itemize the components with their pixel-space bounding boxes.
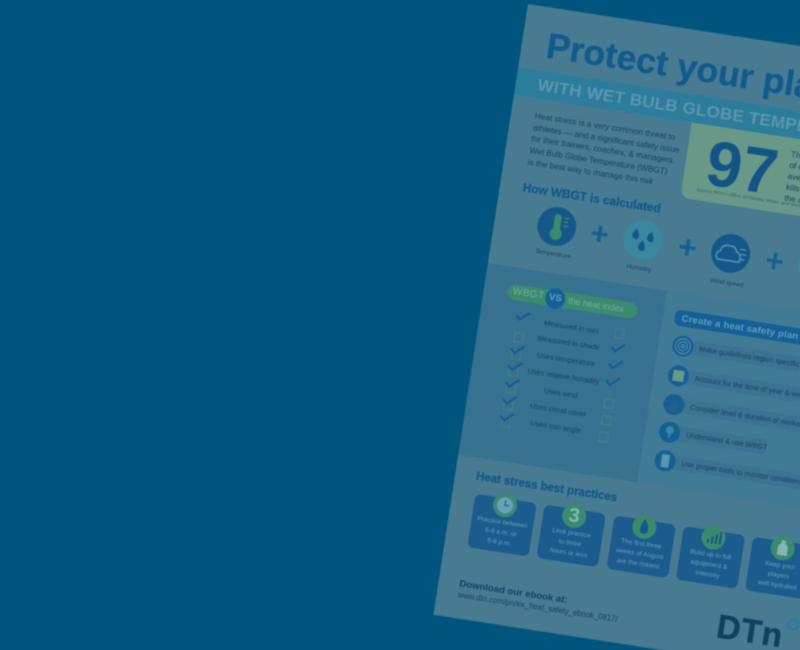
heat safety plan pill: Create a heat safety plan	[681, 313, 799, 342]
icon: clock	[491, 492, 519, 519]
plus: +	[676, 228, 700, 267]
big number 97: 97	[701, 127, 783, 209]
icon: calendar	[666, 364, 690, 388]
row: measured in shade: Measured in shade	[537, 333, 600, 352]
card: practice times	[467, 494, 537, 557]
card: riskiest weeks	[606, 515, 676, 578]
card: practice times: 6-8 p.m.	[487, 537, 512, 548]
icon: humidity	[621, 218, 665, 262]
intro paragraph: for their trainers, coaches, & managers.	[531, 134, 676, 166]
step: time of year	[678, 369, 800, 409]
stat text	[784, 149, 800, 205]
card: hydration: players	[767, 570, 790, 581]
card: build up: equipment &	[690, 559, 728, 571]
step: understand WBGT: Understand & use WBGT	[685, 430, 768, 452]
card: hydration: Keep your	[765, 560, 795, 571]
intro paragraph: Heat stress is a very common threat to	[534, 110, 676, 142]
label: humidity: Humidity	[626, 263, 652, 274]
card: build up: intensity	[695, 569, 720, 580]
card: build up: Build up to full	[690, 548, 732, 562]
panel: WBGT vs heat index	[458, 263, 667, 482]
download heading: Download our ebook at:	[459, 578, 568, 606]
label: temperature: Temperature	[535, 248, 571, 260]
card: limit practice: hours or less	[549, 547, 588, 560]
icon: water bottle	[769, 535, 796, 562]
intro paragraph	[527, 110, 680, 186]
icon: solar	[795, 245, 800, 289]
intro paragraph: Wet Bulb Globe Temperature (WBGT)	[529, 145, 668, 176]
panel: create a heat safety plan	[637, 291, 800, 534]
step: region specific	[682, 339, 800, 372]
icon: drop	[630, 513, 658, 541]
logo ring	[786, 618, 800, 632]
plus: +	[588, 214, 612, 253]
heading: heat stress best practices: Heat stress best practices	[475, 471, 618, 504]
step: workouts	[673, 397, 800, 438]
banner: with wet bulb globe temperature	[514, 67, 800, 174]
icon: number three	[561, 502, 588, 530]
row: uses sun angle: Uses sun angle	[530, 418, 582, 435]
intro paragraph: athletes — and a significant safety issue	[532, 122, 680, 155]
icon: bars	[700, 524, 727, 551]
step: proper tools	[665, 454, 800, 494]
icon: wind speed	[708, 231, 753, 276]
icon: monitor device	[653, 449, 677, 473]
card: limit practice: to three	[558, 538, 582, 548]
card: practice times: Practice between	[477, 515, 528, 530]
poster sheet	[433, 4, 800, 650]
comparison pill	[507, 283, 638, 319]
download url: www.dtn.com/pn/ex_heat_safety_ebook_0817/	[457, 590, 618, 624]
row: uses cloud cover: Uses cloud cover	[530, 401, 587, 419]
icon: figure	[662, 393, 686, 417]
VS badge: VS	[548, 292, 562, 305]
heading: how WBGT is calculated: How WBGT is calculated	[522, 180, 662, 216]
pill label: the heat index: the heat index	[567, 295, 625, 314]
card: riskiest weeks: are the riskiest	[616, 557, 660, 571]
card: limit practice	[536, 504, 606, 567]
icon: thermometer	[658, 420, 682, 444]
icon: number three: 3	[567, 504, 581, 528]
card: limit practice: Limit practice	[552, 527, 591, 540]
card: build up	[675, 526, 745, 589]
card: riskiest weeks: weeks of August	[615, 547, 664, 561]
icon: target	[671, 334, 695, 358]
card: practice times: 6-9 a.m. or	[485, 527, 517, 538]
step: understand WBGT	[669, 425, 767, 455]
step: proper tools: Use proper tools to monitor conditions	[681, 459, 800, 487]
VS badge	[544, 287, 567, 310]
label: wind speed: Wind speed	[709, 277, 744, 289]
card: riskiest weeks: The first three	[621, 538, 662, 551]
step: region specific: Make guidelines region specific	[699, 344, 800, 369]
row: uses relative humidity: Uses relative humidity	[527, 366, 600, 386]
stat box: 97	[680, 122, 800, 250]
row: uses temperature: Uses temperature	[536, 351, 596, 368]
pill label: WBGT: WBGT	[512, 286, 545, 302]
card: hydration: well hydrated	[757, 579, 797, 592]
heat index checkmarks	[598, 328, 626, 442]
intro paragraph: is the best way to manage this risk	[527, 157, 654, 186]
icon: temperature	[535, 204, 579, 249]
WBGT checkmarks	[500, 312, 530, 428]
row: uses wind: Uses wind	[543, 386, 578, 400]
heat safety plan pill	[674, 309, 800, 350]
card: hydration	[745, 537, 800, 600]
row: measured in sun: Measured in sun	[543, 318, 599, 336]
plus: +	[763, 242, 787, 280]
